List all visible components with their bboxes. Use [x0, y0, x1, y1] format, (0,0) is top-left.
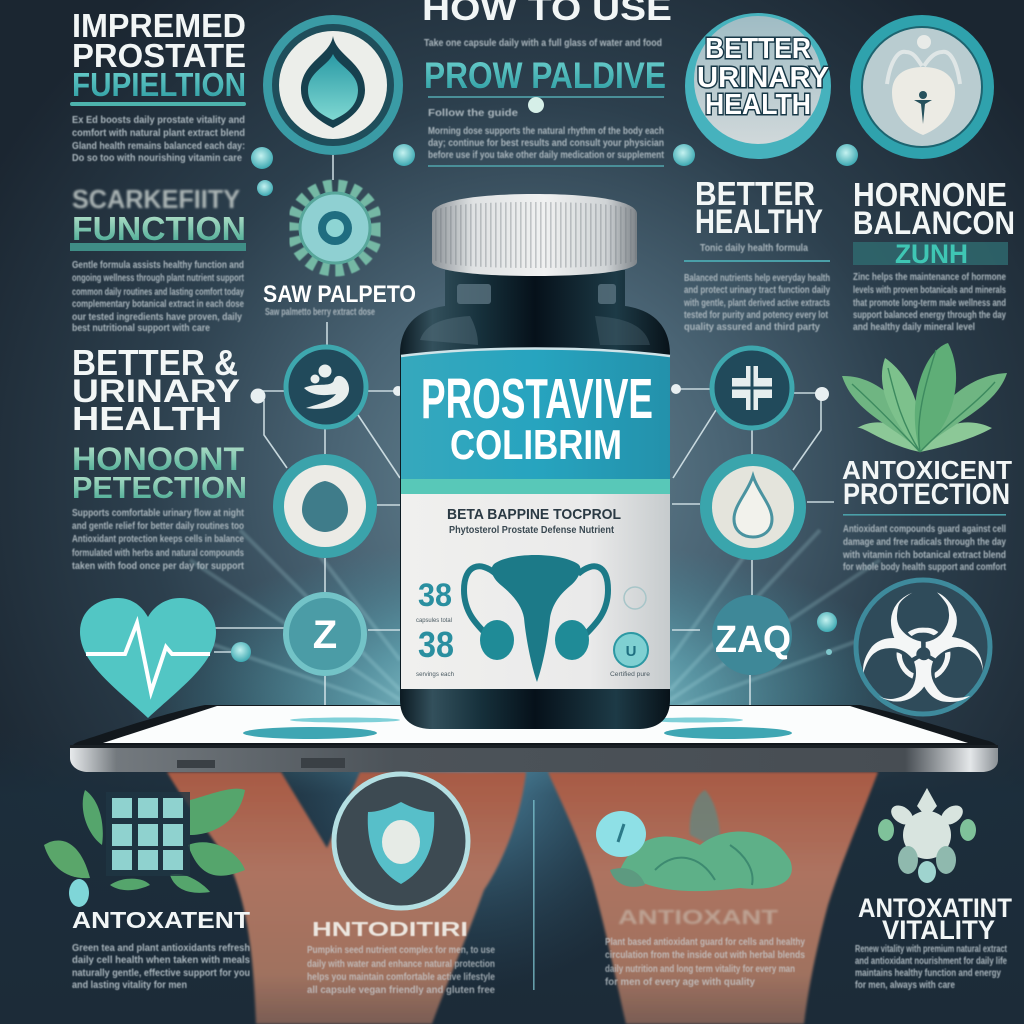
- heading block: antioxidant protection: ANTOXICENT: [842, 455, 1012, 485]
- text block: prostate body: Ex Ed boosts daily prostate vitality and: [72, 115, 245, 126]
- text block: function body: common daily routines and lasting comfort today: [72, 287, 244, 298]
- text block: prostate body: Gland health remains balanced each day:: [72, 141, 245, 152]
- icon: snowflake leaf: [878, 788, 976, 883]
- bottle stats: 38: [418, 624, 454, 665]
- text block: how to use body: day; continue for best results and consult your physician: [428, 138, 664, 149]
- text block: hntoditiri body: all capsule vegan friendly and gluten free: [307, 985, 495, 996]
- text block: better healthy body: tested for purity and potency every lot: [684, 310, 829, 321]
- text block: better healthy body: and protect urinary tract function daily: [684, 285, 830, 296]
- icon: better urinary circle: HEALTH: [705, 89, 811, 121]
- text block: urinary body: taken with food once per day for support: [72, 561, 245, 572]
- text block: function body: complementary botanical extract in each dose: [72, 299, 244, 310]
- icon: grid with leaves: [44, 789, 245, 907]
- heading block: function: SCARKEFIITY: [72, 184, 240, 214]
- text block: prostate body: Do so too with nourishing vitamin care: [72, 153, 242, 164]
- heading block: better urinary health: HEALTH: [72, 400, 222, 437]
- text block: prostate body: comfort with natural plant extract blend: [72, 128, 245, 139]
- icon: small dots top right: [673, 144, 858, 166]
- text block: antoxatent body: and lasting vitality for men: [72, 980, 187, 991]
- text block: vitality body: for men, always with care: [855, 980, 955, 991]
- text block: vitality body: [855, 944, 1007, 991]
- text block: urinary body: Supports comfortable urinary flow at night: [72, 508, 245, 519]
- icon: better urinary circle: URINARY: [697, 62, 829, 94]
- icon: saw palmetto flower: [294, 187, 376, 269]
- text block: antoxatent body: [72, 943, 250, 991]
- heading block: hormone balance: HORNONE: [853, 176, 1007, 213]
- text block: function body: [72, 260, 244, 334]
- tablet: [70, 705, 998, 772]
- heading block: improved prostate function: [70, 7, 246, 106]
- heading block: antoxatint vitality: [858, 893, 1012, 945]
- bottle seals: [610, 587, 651, 678]
- text block: hntoditiri body: Pumpkin seed nutrient complex for men, to use: [307, 945, 495, 956]
- text block: antioxant body: [605, 937, 805, 988]
- text block: function body: our tested ingredients have proven, daily: [72, 312, 242, 323]
- heading block: better healthy: [695, 175, 823, 254]
- icon: prostate organ: [464, 555, 608, 682]
- bottle blue label: COLIBRIM: [450, 421, 622, 468]
- icon: better urinary circle: BETTER: [705, 33, 811, 65]
- heading: how to use: PROW PALDIVE: [424, 55, 666, 96]
- text block: how to use body: [428, 97, 665, 167]
- heading block: improved prostate function: PROSTATE: [72, 37, 246, 74]
- text block: how to use body: before use if you take other daily medication or supplement: [428, 150, 665, 161]
- text block: function body: Gentle formula assists healthy function and: [72, 260, 244, 271]
- heading block: better healthy: Tonic daily health formula: [700, 243, 808, 254]
- text block: better healthy body: Balanced nutrients help everyday health: [684, 273, 830, 284]
- icon: node circle left 2: [273, 454, 377, 558]
- bottle stats: 38: [418, 577, 452, 613]
- bottle stats: capsules total: [416, 618, 452, 624]
- text block: better healthy body: quality assured and third party: [684, 322, 820, 333]
- icon: hormone circle: [850, 15, 994, 159]
- heading block: improved prostate function: FUPIELTION: [72, 66, 246, 103]
- bottle seals: U: [626, 643, 636, 660]
- icon: Z circle: [286, 595, 364, 673]
- icon: small dot right: [817, 612, 837, 655]
- text block: prostate body: [72, 115, 245, 164]
- text block: urinary body: [72, 508, 245, 572]
- text block: function body: ongoing wellness through plant nutrient support: [72, 273, 244, 284]
- hand: left: [167, 772, 526, 1024]
- connector lines: [214, 155, 834, 706]
- icon: Z circle: Z: [313, 613, 337, 657]
- text block: hormone body: and healthy daily mineral level: [853, 322, 975, 333]
- text block: better healthy body: with gentle, plant derived active extracts: [683, 298, 830, 309]
- label: saw palmetto: [263, 281, 416, 318]
- text block: hntoditiri body: helps you maintain comfortable active lifestyle: [307, 972, 495, 983]
- icon: node circle right 2: [700, 454, 806, 560]
- bottle seals: Certified pure: [610, 672, 651, 678]
- heading block: antioxant faint: ANTIOXANT: [618, 907, 778, 929]
- heading block: antoxatint vitality: VITALITY: [882, 915, 995, 945]
- icon: small dots top left: [251, 144, 415, 196]
- bottle body: [400, 270, 670, 729]
- heading block: better healthy: HEALTHY: [695, 203, 823, 241]
- icon: ZAQ circle: [712, 595, 792, 675]
- text block: urinary body: formulated with herbs and natural compounds: [72, 548, 244, 559]
- text block: antioxidant body: [842, 524, 1007, 573]
- text block: urinary body: and gentle relief for better daily routines too: [72, 521, 244, 532]
- heading block: function: FUNCTION: [72, 210, 246, 247]
- bottle white label: Phytosterol Prostate Defense Nutrient: [449, 525, 615, 536]
- product bottle: [400, 194, 670, 729]
- label: saw palmetto: SAW PALPETO: [263, 281, 416, 308]
- icon: prostate drop circle: [263, 15, 403, 155]
- text block: hormone body: [853, 272, 1006, 333]
- icon: green leaves: [842, 343, 1007, 452]
- bottle stats: servings each: [416, 672, 454, 678]
- text block: how to use body: Morning dose supports the natural rhythm of the body each: [428, 126, 664, 137]
- connector nodes: [250, 384, 829, 404]
- icon: heart with pulse: [80, 598, 216, 718]
- icon: biohazard circle: ☣: [856, 564, 990, 738]
- icon: small dot: [231, 642, 251, 662]
- icon: node circle left 1: [286, 347, 366, 427]
- heading block: better urinary health: BETTER &: [72, 342, 238, 383]
- text block: how to use body: Follow the guide: [428, 108, 518, 119]
- text block: hntoditiri body: [307, 945, 495, 996]
- heading block: antioxidant protection: [842, 455, 1012, 516]
- heading: how to use: [422, 0, 672, 98]
- heading block: improved prostate function: IMPREMED: [72, 7, 246, 44]
- heading: how to use: Take one capsule daily with a full glass of water and food: [424, 38, 662, 49]
- text block: hntoditiri body: daily with water and enhance natural protection: [307, 959, 495, 970]
- heading block: hormone balance: [853, 176, 1015, 269]
- heading block: hormone balance: ZUNH: [895, 239, 968, 269]
- icon: better urinary circle: [685, 13, 831, 159]
- icon: shield circle: [334, 774, 468, 908]
- heading block: better urinary health: HONOONT: [72, 441, 244, 477]
- bottle blue label: PROSTAVIVE: [421, 367, 653, 431]
- icon: node circle right 1: [712, 348, 792, 428]
- bottle cap: [432, 194, 637, 276]
- bottle blue label: [401, 348, 670, 482]
- heading block: hntoditiri: HNTODITIRI: [312, 919, 468, 941]
- heading block: better healthy: BETTER: [695, 175, 815, 212]
- bottle stats: [416, 577, 454, 678]
- text block: antioxant body: daily nutrition and long term vitality for every man: [605, 964, 795, 975]
- text block: urinary body: Antioxidant protection keeps cells in balance: [72, 534, 244, 545]
- hand: right: [548, 772, 878, 1024]
- heading block: antoxatent: ANTOXATENT: [72, 907, 250, 933]
- label: saw palmetto: Saw palmetto berry extract dose: [265, 307, 375, 318]
- heading block: better urinary health: PETECTION: [72, 470, 247, 505]
- icon: pill with herbs: [596, 790, 792, 891]
- icon: ZAQ circle: ZAQ: [715, 619, 791, 661]
- text block: antoxatent body: Green tea and plant antioxidants refresh: [72, 943, 250, 954]
- bottle white label: BETA BAPPINE TOCPROL: [447, 506, 621, 523]
- text block: function body: best nutritional support with care: [72, 323, 210, 334]
- text block: antioxant body: Plant based antioxidant guard for cells and healthy: [605, 937, 805, 948]
- text block: antioxant body: for men of every age with quality: [605, 977, 755, 988]
- text block: antoxatent body: daily cell health when taken with meals: [72, 955, 250, 966]
- heading block: function: [70, 184, 246, 251]
- bottle white label: [401, 479, 670, 689]
- bottle neck highlights: [420, 284, 650, 345]
- text block: antioxant body: circulation from the inside out with herbal blends: [605, 950, 805, 961]
- text block: better healthy body: [683, 260, 830, 333]
- text block: antoxatent body: naturally gentle, effective support for you: [72, 968, 250, 979]
- heading block: better urinary health: URINARY: [72, 373, 240, 409]
- heading block: better urinary health: [72, 342, 247, 505]
